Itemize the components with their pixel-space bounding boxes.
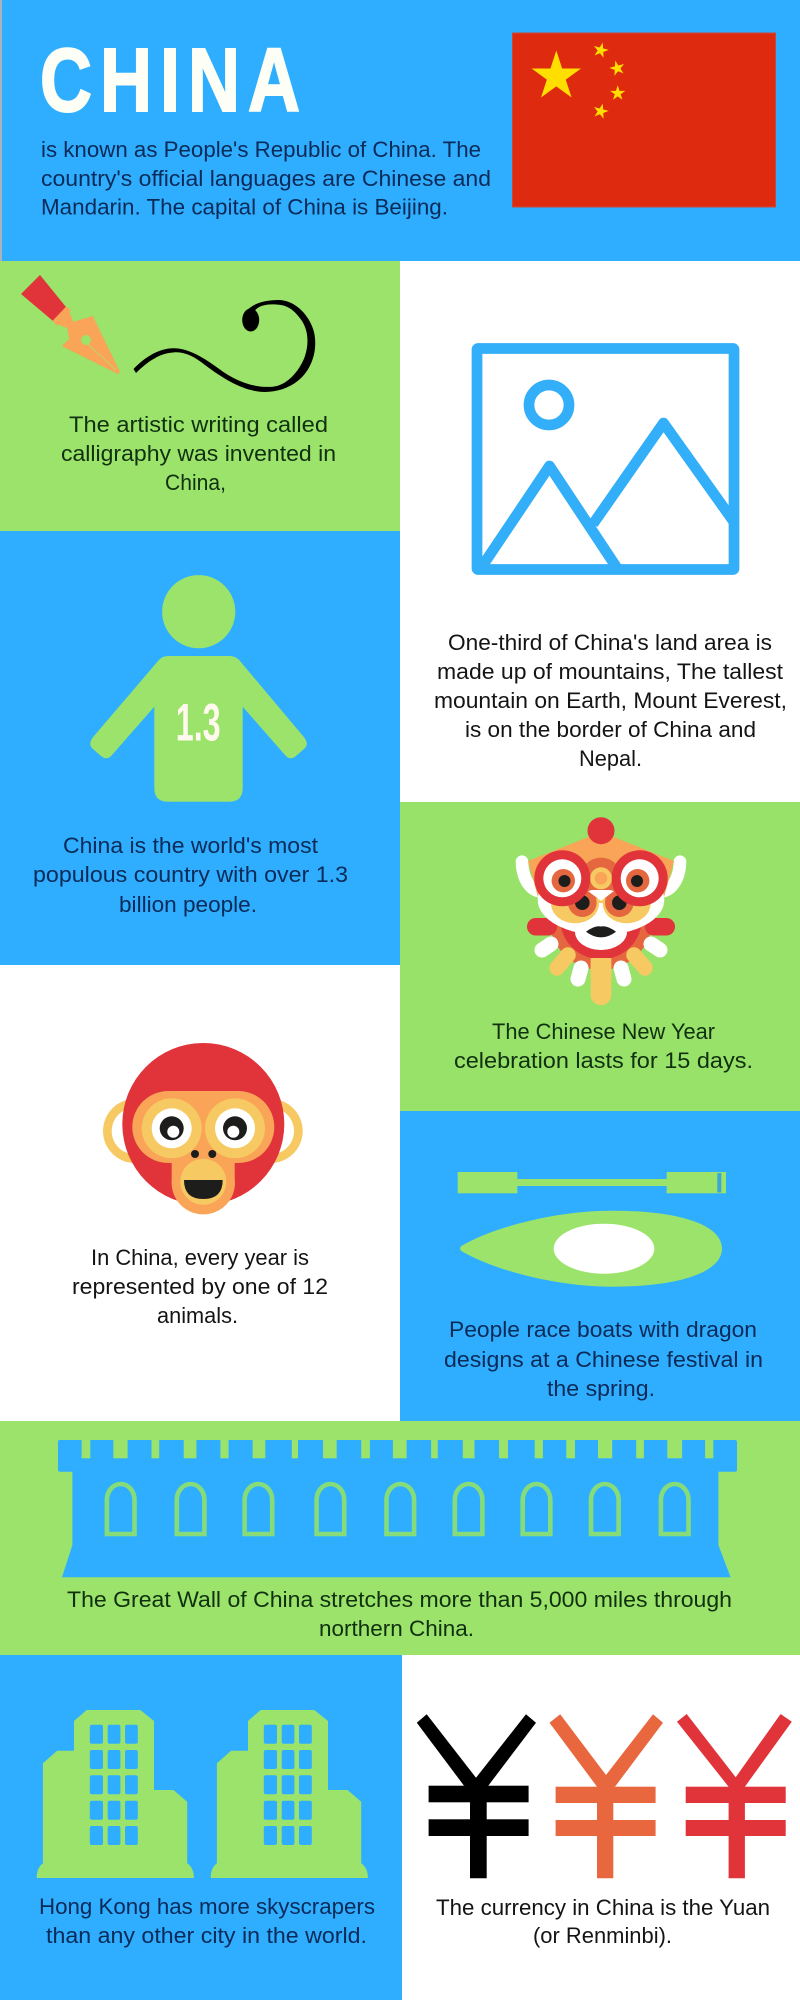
text: mountains: Nepal. [579, 746, 642, 771]
text: zodiac [72, 1245, 328, 1328]
text: population: billion people. [119, 892, 257, 917]
text: 1.3: 1.3 [176, 694, 221, 753]
text: skyscrapers: than any other city in the world. [46, 1923, 367, 1948]
panel: header [0, 0, 800, 261]
icon: ink swash [134, 300, 315, 392]
text: intro: Mandarin. The capital of China is Beijing. [41, 194, 448, 220]
text: dragon boats: the spring. [547, 1376, 655, 1401]
text: population: populous country with over 1.3 [33, 862, 348, 887]
text: currency: The currency in China is the Yuan [436, 1895, 770, 1920]
text: currency [436, 1895, 770, 1948]
icon: person [90, 575, 307, 802]
text: currency: (or Renminbi). [533, 1923, 672, 1948]
icon: building right [211, 1710, 368, 1878]
panel: new year [400, 802, 800, 1111]
text: new year [454, 1019, 753, 1073]
text: mountains: One-third of China's land area is [448, 630, 772, 655]
text: dragon boats: designs at a Chinese festival in [444, 1347, 763, 1372]
text: dragon boats: People race boats with dragon [449, 1317, 757, 1342]
text: skyscrapers: Hong Kong has more skyscrapers [39, 1894, 375, 1919]
text: zodiac: In China, every year is [91, 1245, 309, 1270]
panel: population [0, 531, 400, 965]
text: great wall: northern China. [319, 1616, 474, 1641]
text: mountains: made up of mountains, The tallest [437, 659, 783, 684]
text: population: China is the world's most [63, 833, 318, 858]
text: population [33, 833, 348, 917]
icon: wall [58, 1438, 737, 1577]
icon: mountain picture [477, 348, 734, 570]
text: skyscrapers [39, 1894, 375, 1948]
icon: calligraphy pen [21, 275, 120, 374]
panel: mountains [400, 261, 800, 802]
text: great wall [67, 1587, 732, 1641]
text: dragon boats [444, 1317, 763, 1401]
text: calligraphy [61, 412, 336, 495]
text: calligraphy: calligraphy was invented in [61, 441, 336, 466]
panel: currency [402, 1655, 800, 2000]
text: zodiac: animals. [157, 1303, 238, 1328]
icon: yuan red [677, 1714, 792, 1878]
icon: yuan orange [550, 1714, 663, 1878]
text: intro: is known as People's Republic of China. The [41, 137, 481, 162]
text: calligraphy: The artistic writing called [69, 412, 328, 437]
text: intro [41, 137, 491, 220]
icon: kayak [460, 1211, 722, 1287]
text: intro: country's official languages are Chinese and [41, 166, 491, 191]
text: calligraphy: China, [165, 470, 226, 495]
panel: zodiac [0, 965, 400, 1422]
text: zodiac: represented by one of 12 [72, 1274, 328, 1299]
panel: skyscrapers [0, 1655, 402, 2000]
text: mountains: mountain on Earth, Mount Everest, [434, 688, 787, 713]
text: new year: The Chinese New Year [492, 1019, 715, 1044]
text: new year: celebration lasts for 15 days. [454, 1048, 753, 1073]
icon: lion dance mask [516, 817, 686, 1005]
icon: yuan black [417, 1714, 536, 1878]
icon: building left [37, 1710, 194, 1878]
icon: flag of China [512, 33, 776, 207]
icon: paddle [458, 1172, 726, 1193]
title: CHINA [40, 30, 308, 131]
panel: dragon boats [400, 1111, 800, 1421]
text: mountains [434, 630, 787, 771]
text: mountains: is on the border of China and [465, 717, 756, 742]
text: great wall: The Great Wall of China stretches more than 5,000 miles through [67, 1587, 732, 1612]
panel: great wall [0, 1421, 800, 1655]
icon: monkey [103, 1043, 303, 1214]
panel: calligraphy [0, 261, 400, 531]
